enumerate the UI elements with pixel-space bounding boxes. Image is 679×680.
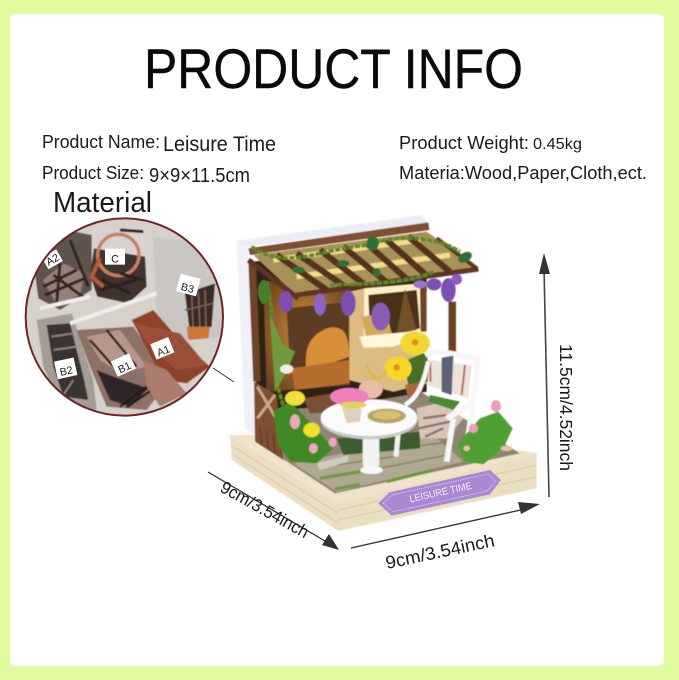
spec: product weight: 0.45kg	[533, 136, 582, 153]
dollhouse model	[230, 215, 537, 531]
title: PRODUCT INFO	[144, 37, 523, 100]
label A2	[42, 249, 63, 270]
cream brick wall	[349, 288, 427, 392]
name plaque	[378, 470, 501, 516]
bag: B2	[37, 313, 97, 410]
window	[363, 283, 427, 343]
label B3: B3	[180, 281, 195, 296]
label A2: A2	[44, 252, 62, 269]
spec: product name	[42, 132, 276, 156]
label A1: A1	[155, 343, 172, 359]
wisteria clusters	[279, 274, 462, 331]
material parts photo circle	[20, 213, 230, 420]
left depth arrow	[208, 472, 339, 550]
front width label: 9cm/3.54inch	[384, 530, 496, 573]
front width arrow	[351, 502, 540, 548]
armchair	[396, 352, 478, 462]
bag: A1	[132, 310, 210, 407]
label B3	[176, 274, 201, 297]
material heading: Material	[53, 187, 152, 219]
label C: C	[111, 254, 119, 266]
bag: B3	[153, 237, 223, 340]
spec: product size: Product Size:	[42, 163, 144, 183]
white opening right of window	[427, 292, 450, 362]
teapot and pink flowers	[330, 365, 385, 408]
pergola roof	[248, 222, 478, 298]
round table	[321, 399, 417, 474]
leaves	[258, 236, 474, 303]
label A1	[150, 337, 175, 361]
spec: material list: Materia:Wood,Paper,Cloth,ect.	[399, 162, 647, 183]
pointer line from circle to model	[213, 368, 234, 382]
spec: product name: Leisure Time	[163, 133, 276, 156]
spec: product weight	[399, 133, 582, 153]
name plaque: LEISURE TIME	[409, 481, 473, 505]
right shrub with pink buds	[457, 400, 513, 464]
wooden posts and lattice	[248, 262, 456, 460]
height arrow	[539, 253, 550, 497]
label B2	[54, 357, 77, 380]
spec: product weight: Product Weight:	[399, 133, 529, 153]
label B1	[111, 353, 136, 378]
label B1: B1	[116, 360, 133, 376]
circle outline	[26, 218, 223, 416]
left climbing plants	[270, 315, 348, 470]
left depth label: 9cm/3.54inch	[217, 477, 312, 542]
white wall top edge	[237, 215, 428, 247]
yellow flowers on wall	[385, 331, 430, 398]
bag: C	[90, 227, 153, 303]
height dimension label: 11.5cm/4.52inch	[556, 344, 576, 471]
spec: product size	[42, 163, 250, 187]
spec: product size: 9×9×11.5cm	[149, 165, 250, 187]
label C	[105, 249, 125, 266]
wooden base	[230, 435, 537, 531]
label B2: B2	[59, 364, 74, 379]
bag: A2	[35, 230, 92, 310]
bag: B1	[76, 326, 156, 410]
spec: product name: Product Name:	[42, 132, 160, 152]
white brick side wall	[237, 240, 256, 437]
roof vines	[252, 238, 460, 405]
back floor and paving	[257, 385, 520, 493]
interior room	[253, 242, 427, 413]
